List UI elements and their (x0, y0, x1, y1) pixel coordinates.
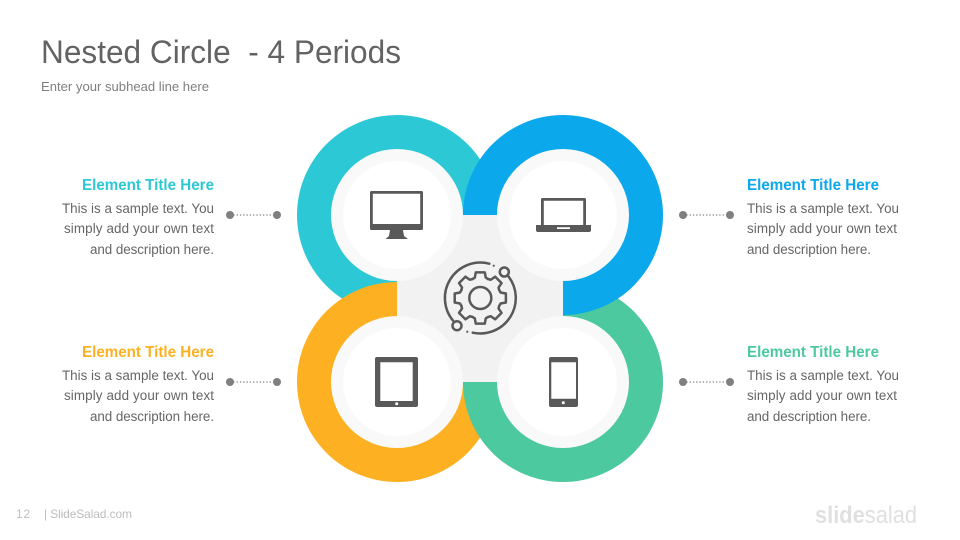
footer: site name: | SlideSalad.com (44, 507, 132, 521)
ring: orange (297, 282, 497, 482)
heading: Element Title Here (747, 344, 879, 361)
description (62, 201, 214, 257)
description: simply add your own text (64, 388, 214, 403)
heading: Element Title Here (747, 177, 879, 194)
description: This is a sample text. You (747, 201, 899, 216)
icon: phone (549, 357, 578, 407)
title: Nested Circle - 4 Periods (41, 34, 401, 70)
disc: top right (497, 149, 629, 281)
icon: laptop (536, 198, 591, 232)
description: and description here. (90, 242, 214, 257)
logo: slidesalad (815, 502, 917, 529)
nested circle diagram (297, 115, 663, 482)
description: and description here. (747, 409, 871, 424)
icon: tablet (375, 357, 418, 407)
description: simply add your own text (64, 221, 214, 236)
icon: monitor (370, 191, 423, 239)
description: simply add your own text (747, 221, 897, 236)
connector (679, 378, 734, 386)
description: and description here. (747, 242, 871, 257)
description (62, 368, 214, 424)
connector (226, 211, 281, 219)
callout: bottom right (679, 344, 899, 424)
heading: Element Title Here (82, 177, 214, 194)
description (747, 201, 899, 257)
description: This is a sample text. You (62, 201, 214, 216)
connector (679, 211, 734, 219)
heading: Element Title Here (82, 344, 214, 361)
center panel (397, 215, 563, 382)
ring: blue (463, 115, 663, 315)
description: simply add your own text (747, 388, 897, 403)
connector (226, 378, 281, 386)
ring: teal (297, 115, 497, 315)
disc: bottom left (331, 316, 463, 448)
callout: top right (679, 177, 899, 257)
callout: top left (62, 177, 281, 257)
callout: bottom left (62, 344, 281, 424)
footer: page number: 12 (16, 507, 30, 521)
disc: bottom right (497, 316, 629, 448)
icon: gear with orbit (445, 263, 516, 333)
subhead: Enter your subhead line here (41, 79, 209, 94)
ring: green (463, 282, 663, 482)
description (747, 368, 899, 424)
description: and description here. (90, 409, 214, 424)
disc: top left (331, 149, 463, 281)
description: This is a sample text. You (62, 368, 214, 383)
description: This is a sample text. You (747, 368, 899, 383)
